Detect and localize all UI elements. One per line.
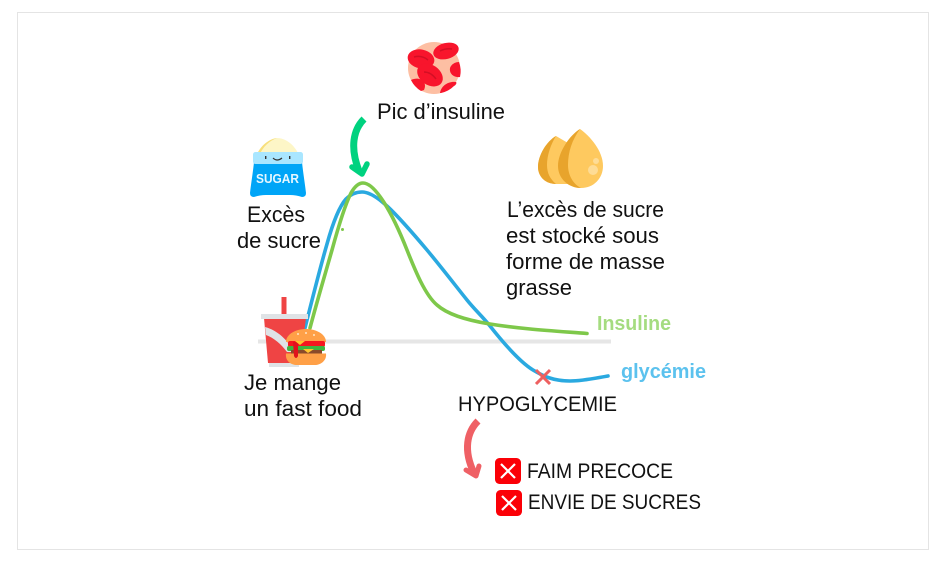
text: Je mange un fast food: Je mange [244, 370, 341, 395]
icon: sugar bag: SUGAR [256, 171, 300, 186]
icon: burger [286, 329, 326, 365]
text: Excès de sucre: Excès [247, 202, 305, 227]
icon: red blood cells [406, 40, 461, 94]
heading: Pic d'insuline: Pic d’insuline [377, 99, 505, 124]
baseline axis [258, 340, 611, 344]
text: fat storage: L’excès de sucre [507, 197, 664, 222]
icon: sugar bag [250, 138, 306, 197]
text: Excès de sucre: de sucre [237, 228, 321, 253]
text: HYPOGLYCEMIE: HYPOGLYCEMIE [458, 393, 617, 416]
chart: glycemia curve [305, 192, 608, 381]
icon: cross box 1 [495, 458, 521, 484]
text: fat storage: grasse [506, 275, 572, 300]
icon: cross box 2 [496, 490, 522, 516]
text: Je mange un fast food [244, 370, 362, 421]
text: ENVIE DE SUCRES: ENVIE DE SUCRES [528, 491, 701, 514]
arrow: red to symptoms [466, 421, 479, 476]
legend: Insuline: Insuline [597, 313, 671, 335]
icon: red cross on curve [536, 370, 550, 384]
legend: glycemie: glycémie [621, 361, 706, 383]
chart: insulin curve [310, 183, 587, 334]
text: fat storage: forme de masse [506, 249, 665, 274]
icon: soda cup [261, 297, 308, 367]
text: Je mange un fast food: un fast food [244, 396, 362, 421]
text: fat storage: est stocké sous [506, 223, 659, 248]
arrow: green to peak [352, 119, 367, 174]
text: FAIM PRECOCE: FAIM PRECOCE [527, 460, 673, 483]
text: fat storage [506, 197, 665, 300]
icon: fat drops [538, 129, 603, 188]
text: Excès de sucre [237, 202, 321, 253]
